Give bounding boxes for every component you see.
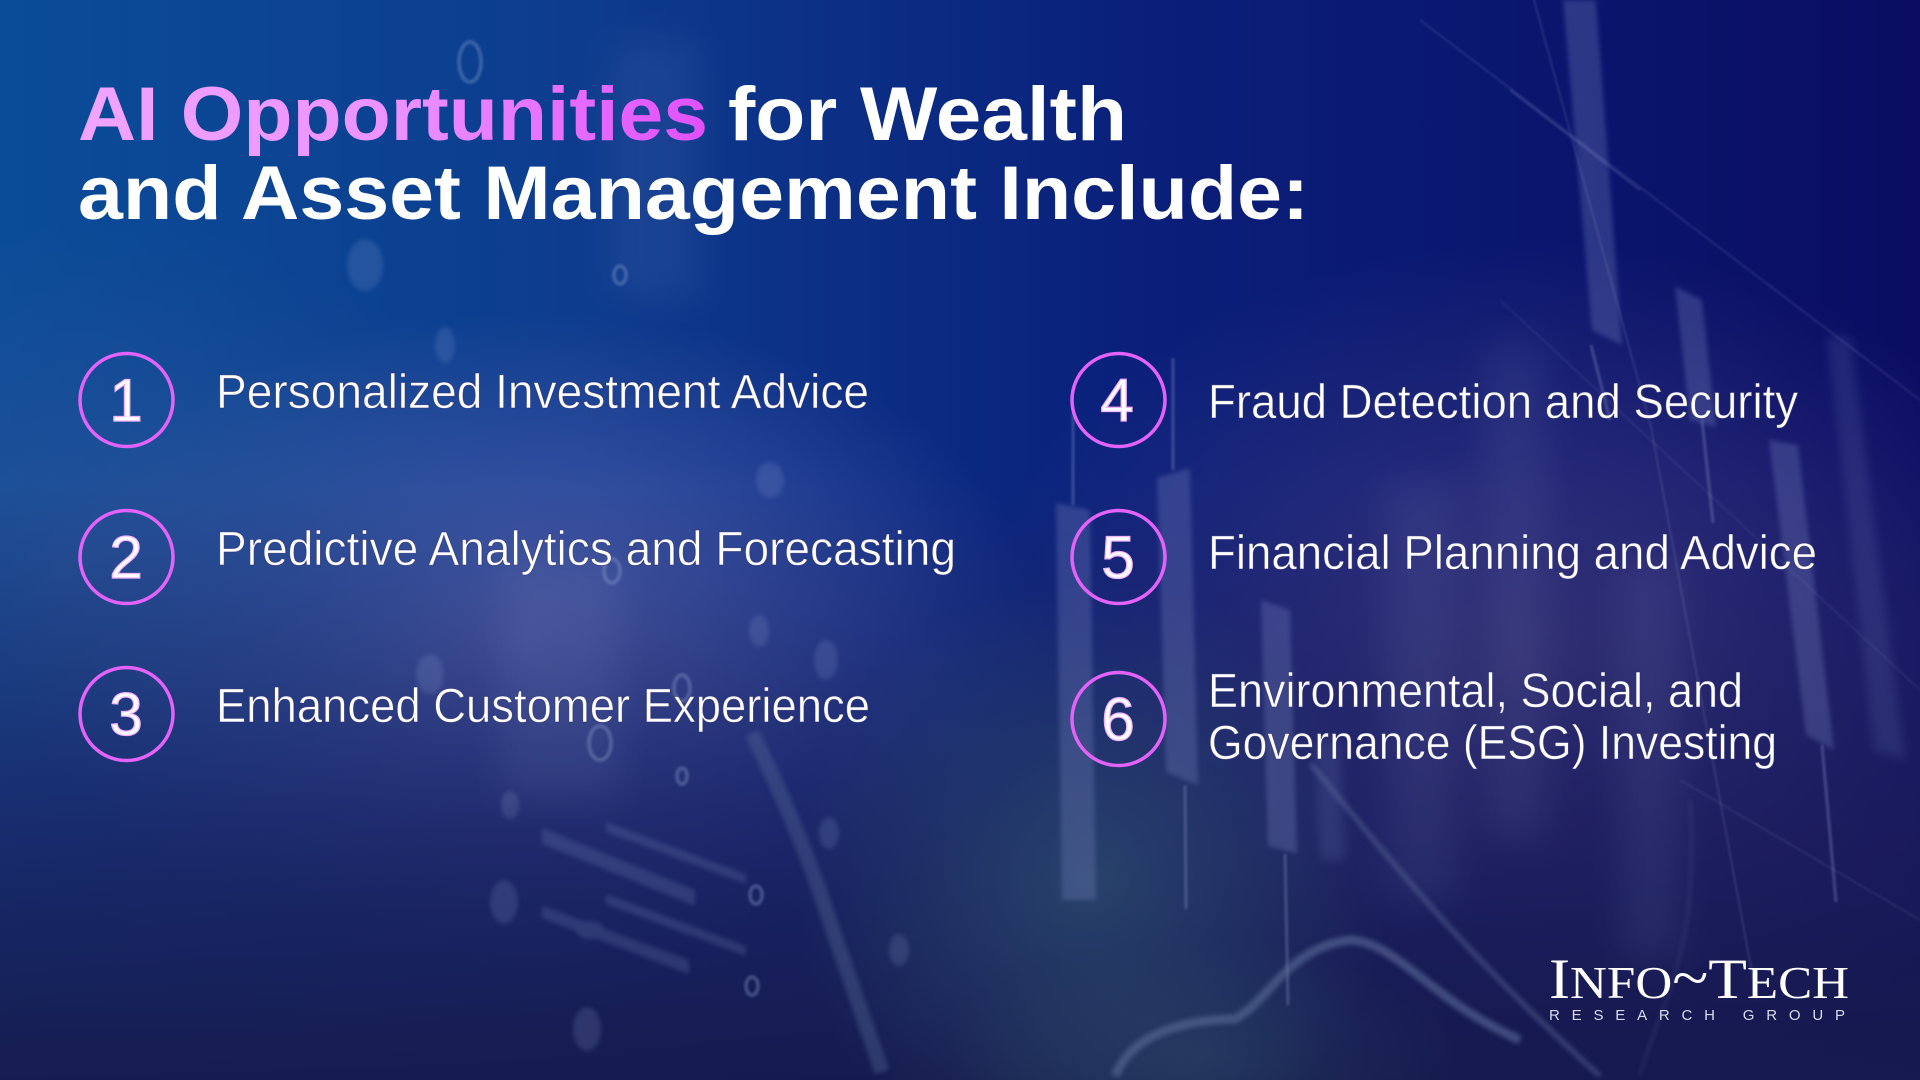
chart lines — [1420, 0, 1920, 1000]
list item 4: Fraud Detection and Security — [1208, 376, 1798, 429]
floating numbers — [459, 42, 762, 995]
list item 4 — [1072, 354, 1798, 446]
list item 3: Enhanced Customer Experience — [216, 680, 870, 733]
list item 4: 4 — [1100, 367, 1134, 434]
title — [78, 72, 1309, 236]
candlesticks — [1056, 0, 1834, 900]
list item 3 — [80, 668, 870, 760]
title: and Asset Management Include: — [78, 151, 1309, 236]
title: for Wealth — [728, 72, 1127, 157]
list item 6 — [1072, 665, 1777, 770]
list item 6: 6 — [1101, 686, 1135, 753]
list item 5 — [1072, 510, 1817, 604]
list item 6: Governance (ESG) Investing — [1208, 717, 1777, 770]
logo: Info-Tech Research Group: INFO~TECH — [1549, 945, 1849, 1011]
list item 6: Environmental, Social, and — [1208, 665, 1743, 718]
list item 1 — [80, 354, 869, 446]
list item 2: 2 — [109, 524, 143, 591]
title: AI Opportunities — [78, 72, 708, 157]
list item 5: Financial Planning and Advice — [1208, 527, 1817, 580]
list item 1: Personalized Investment Advice — [216, 366, 869, 419]
list item 2: Predictive Analytics and Forecasting — [216, 523, 956, 576]
list item 5: 5 — [1101, 524, 1135, 591]
list item 3: 3 — [109, 681, 143, 748]
logo: Info-Tech Research Group: RESEARCH GROUP — [1549, 1007, 1845, 1024]
list item 2 — [80, 510, 956, 604]
list item 1: 1 — [109, 367, 143, 434]
